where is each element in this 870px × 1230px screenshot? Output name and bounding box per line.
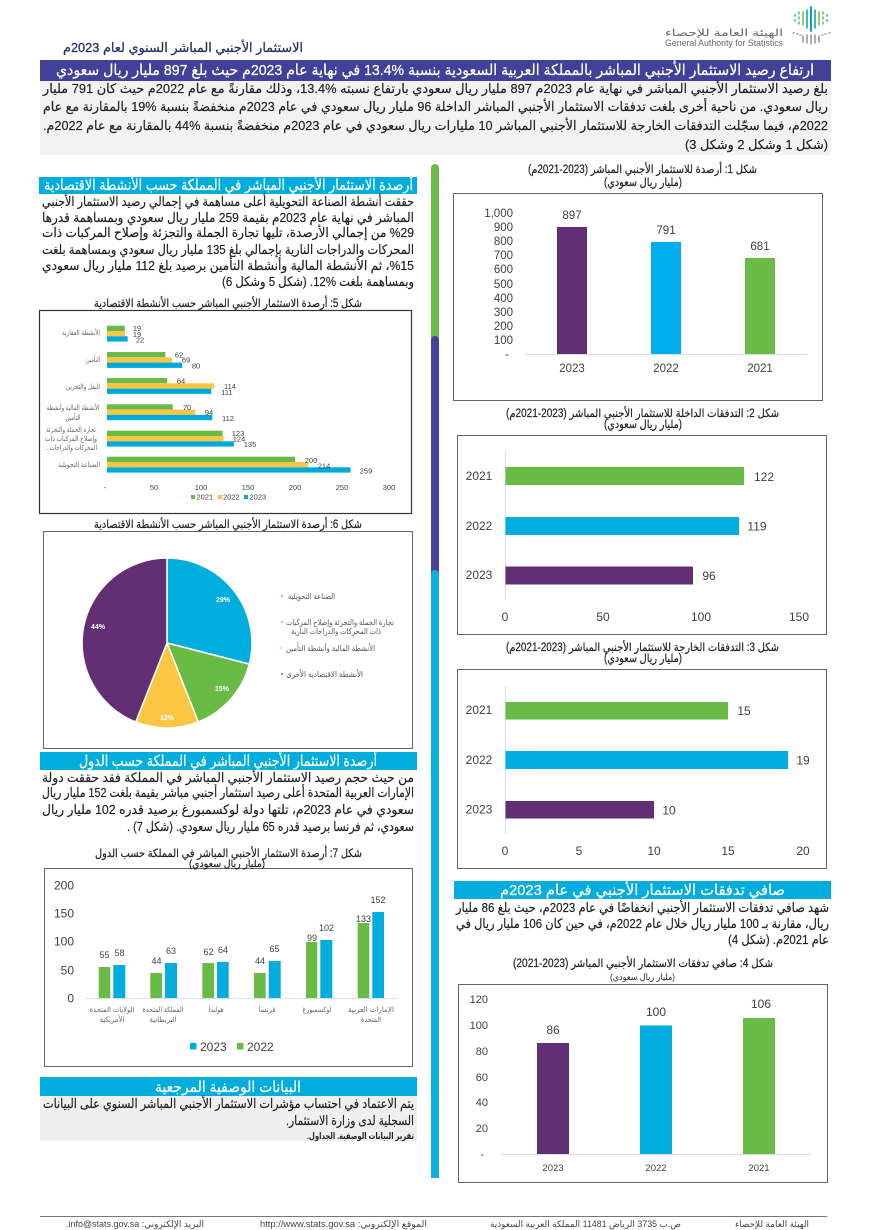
text block: economic activity: %15، ثم الأنشطة المالية وأنشطة التأمين برصيد بلغ 112 مليار ريال سعودي — [42, 256, 414, 274]
chart title: figure 1: (مليار ريال سعودي) — [604, 177, 682, 190]
axis, year and value labels: 2023 — [466, 802, 493, 816]
chart title: figure 1: شكل 1: أرصدة للاستثمار الأجنبي المباشر (2023-2021م) — [528, 161, 757, 177]
country labels: هولندا — [208, 1005, 224, 1014]
category labels: تجارة الجملة والتجزئة — [46, 427, 96, 434]
y axis labels: 200 — [494, 321, 513, 333]
value and year labels — [542, 997, 771, 1174]
value and year labels: 2023 — [559, 363, 585, 375]
chart title: figure 3 — [506, 640, 779, 666]
heading: stocks by economic activity: أرصدة الاستثمار الأجنبي المباشر في المملكة حسب الأنشطة الاقتصادية — [44, 175, 413, 195]
y axis labels: 400 — [494, 293, 513, 305]
heading: net FDI flows — [454, 880, 831, 900]
intro text block — [40, 80, 831, 155]
text block: reference metadata: السجلية لدى وزارة الاستثمار. — [286, 1113, 414, 1129]
pie chart: figure 6 shares by activity — [43, 531, 413, 749]
category labels — [45, 328, 100, 469]
text block: reference metadata: يتم الاعتماد في احتساب مؤشرات الاستثمار الأجنبي المباشر السنوي على البيانات — [43, 1095, 414, 1112]
text block: stocks by country: سعودي، ثم فرنسا برصيد قدره 65 مليار ريال سعودي. (شكل 7) . — [127, 819, 414, 835]
footer: البريد الإلكتروني: info@stats.gov.sa. — [66, 1219, 204, 1230]
value and year labels: 86 — [546, 1023, 560, 1037]
y axis labels: 300 — [494, 307, 513, 319]
legend: 2023 — [200, 1040, 227, 1054]
report subtitle: الاستثمار الأجنبي المباشر السنوي لعام 2023م — [63, 39, 303, 56]
slice percentages: 12% — [160, 715, 175, 722]
value labels: 55 — [99, 950, 110, 960]
y axis labels — [484, 208, 513, 361]
value labels: 69 — [182, 356, 190, 364]
value and year labels: 897 — [562, 210, 582, 222]
text block: economic activity: %29 من إجمالي الأرصدة، تليها تجارة الجملة والتجزئة وإصلاح المركبات ذات — [42, 224, 414, 241]
value labels: 65 — [269, 944, 280, 954]
text block: stocks by country: الإمارات العربية المتحدة أعلى رصيد استثمار أجنبي مباشر بقيمة بلغت 152 مليار ريال — [42, 784, 414, 801]
text block: economic activity: المحركات والدراجات النارية بإجمالي بلغ 135 مليار ريال سعودي وبمساهمة بلغت — [42, 242, 414, 258]
y axis labels: 150 — [54, 906, 74, 920]
country labels: البريطانية — [150, 1015, 176, 1024]
bars — [506, 702, 788, 818]
heading: stocks by country: أرصدة الاستثمار الأجنبي المباشر في المملكة حسب الدول — [79, 751, 377, 771]
chart title: figure 6: شكل 6: أرصدة الاستثمار الأجنبي المباشر حسب الأنشطة الاقتصادية — [94, 516, 362, 532]
category labels: المحركات والدراجات... — [45, 444, 97, 452]
y axis labels: 200 — [54, 878, 74, 892]
axis, year and value labels: 0 — [502, 610, 509, 624]
bar chart: figure 1 FDI stock — [453, 193, 823, 401]
legend: 2021 — [196, 492, 213, 502]
value labels: 19 — [133, 330, 141, 339]
value labels: 64 — [218, 945, 228, 955]
slice percentages: 29% — [216, 597, 231, 604]
text block: net FDI flows — [455, 899, 829, 948]
axis, year and value labels: 50 — [596, 610, 610, 624]
chart title: figure 2: شكل 2: التدفقات الداخلة للاستثمار الأجنبي المباشر (2023-2021م) — [506, 406, 779, 421]
axis, year and value labels: 96 — [702, 569, 716, 583]
text block: stocks by country: سعودي في عام 2023م، تلتها دولة لوكسمبورغ برصيد قدره 102 مليار ريال — [42, 802, 414, 818]
logo text: General Authority for Statistics — [665, 38, 783, 48]
chart title: figure 4: شكل 4: صافي تدفقات الاستثمار الأجنبي المباشر (2023-2021) — [513, 956, 773, 971]
bars 2023 — [113, 912, 384, 998]
country labels: الولايات المتحدة — [90, 1005, 134, 1014]
slice percentages — [91, 597, 231, 722]
country labels: المتحدة — [361, 1015, 381, 1024]
category labels: التأمين — [86, 354, 100, 364]
chart title: figure 7: شكل 7: أرصدة الاستثمار الأجنبي المباشر في المملكة حسب الدول — [95, 845, 362, 861]
legend: 2023 — [250, 492, 266, 502]
chart title: figure 4 — [513, 956, 773, 982]
axis, year and value labels: 5 — [576, 844, 583, 858]
y axis labels: 120 — [470, 994, 488, 1006]
value axis: 250 — [336, 483, 348, 492]
country labels: لوكسمبورغ — [302, 1005, 332, 1014]
value labels: 135 — [244, 440, 256, 449]
y axis labels: 50 — [61, 964, 74, 978]
y axis labels: - — [480, 1149, 484, 1161]
bars — [557, 227, 775, 354]
axis, year and value labels: 10 — [647, 844, 661, 858]
vertical divider bar: green — [431, 164, 439, 346]
intro text block: (شكل 1 وشكل 2 وشكل 3) — [685, 137, 828, 153]
axis, year and value labels: 15 — [737, 704, 751, 718]
value and year labels: 2021 — [748, 1163, 770, 1174]
slice percentages: 44% — [91, 624, 106, 631]
text block: economic activity — [42, 192, 414, 290]
y axis labels: 900 — [494, 222, 513, 234]
chart title: figure 7 — [95, 845, 362, 870]
value labels: 44 — [255, 956, 265, 966]
y axis labels: - — [505, 349, 509, 361]
y axis labels — [54, 878, 74, 1006]
value labels: 70 — [183, 403, 191, 412]
value labels: 58 — [114, 948, 125, 958]
bar chart: figure 4 net flows — [458, 984, 828, 1183]
y axis labels: 500 — [494, 279, 513, 291]
axis, year and value labels: 100 — [691, 610, 711, 624]
axis, year and value labels: 2022 — [466, 753, 493, 767]
axis, year and value labels — [466, 703, 810, 858]
country labels: الإمارات العربية — [348, 1005, 394, 1014]
value labels: 114 — [224, 382, 236, 391]
category labels: الأنشطة العقارية — [62, 328, 100, 337]
pie legend: الصناعة التحويلية — [288, 592, 335, 601]
bar chart: figure 7 stocks by country — [44, 868, 413, 1067]
value labels: 44 — [151, 956, 162, 966]
text block: stocks by country — [42, 769, 414, 835]
value axis — [104, 483, 395, 492]
intro text block: 2022م، فيما سجّلت التدفقات الخارجة للاستثمار الأجنبي المباشر 10 مليارات ريال سعودي في عام 2023م منخفضةً بنسبة %44 بالمقارنة مع عام 2022م. — [43, 117, 828, 134]
text block: net FDI flows: عام 2021م. (شكل 4) — [728, 932, 829, 947]
legend — [190, 1040, 274, 1054]
value labels: 62 — [203, 947, 214, 957]
value and year labels: 2023 — [542, 1163, 564, 1174]
y axis labels: 80 — [476, 1046, 488, 1058]
country labels — [90, 1005, 394, 1024]
logo text: الهيئة العامة للإحصاء — [665, 28, 783, 39]
footer: الموقع الإلكتروني: http://www.stats.gov.sa — [260, 1219, 427, 1230]
value labels: 112 — [222, 414, 234, 423]
axis, year and value labels: 150 — [789, 610, 809, 624]
value labels: 111 — [221, 388, 233, 397]
value labels: 63 — [166, 946, 176, 956]
heading: reference metadata: البيانات الوصفية المرجعية — [155, 1079, 301, 1096]
value labels: 22 — [136, 336, 144, 344]
value labels: 259 — [360, 466, 372, 476]
vertical divider bar: blue — [431, 570, 439, 1178]
axis, year and value labels: 19 — [796, 754, 810, 768]
footer: الهيئة العامة للإحصاء — [735, 1219, 809, 1230]
chart title: figure 5: شكل 5: أرصدة الاستثمار الأجنبي المباشر حسب الأنشطة الاقتصادية — [94, 295, 362, 311]
bars 2021 — [107, 326, 295, 462]
axis, year and value labels: 122 — [754, 470, 774, 484]
chart title: figure 2 — [506, 406, 779, 432]
legend — [191, 492, 266, 502]
pie legend: تجارة الجملة والتجزئة وإصلاح المركبات — [286, 618, 394, 628]
bar chart: figure 5 stocks by activity — [38, 310, 412, 514]
main headline bar: ارتفاع رصيد الاستثمار الأجنبي المباشر بالمملكة العربية السعودية بنسبة %13.4 في نهاية عام 2023م حيث بلغ 897 مليار ريال سعودي — [56, 60, 814, 80]
y axis labels: 100 — [54, 934, 74, 948]
value labels: 80 — [192, 362, 200, 370]
y axis labels: 100 — [470, 1020, 488, 1032]
value labels: 124 — [233, 434, 245, 444]
y axis labels: 20 — [476, 1123, 488, 1135]
country labels: فرنسا — [258, 1005, 276, 1014]
value axis: 200 — [289, 483, 301, 492]
pie legend: الأنشطة الاقتصادية الأخرى — [286, 669, 363, 679]
value labels: 133 — [356, 914, 371, 924]
logo: General Authority for Statistics — [665, 6, 830, 48]
pie slices — [82, 558, 252, 728]
bars 2022 — [107, 331, 308, 467]
category labels: الصناعة التحويلية — [58, 462, 100, 469]
intro text block: بلغ رصيد الاستثمار الأجنبي المباشر في نهاية عام 2023م 897 مليار ريال سعودي بارتفاع نسبته %13.4، وذلك مقارنةً مع عام 2022م حيث كان 791 مليار — [42, 80, 828, 97]
bars 2023 — [107, 336, 350, 473]
footer — [40, 1216, 827, 1230]
heading: reference metadata — [40, 1077, 417, 1096]
slice percentages: 15% — [215, 686, 230, 693]
chart title: figure 7: (مليار ريال سعودي) — [189, 859, 265, 870]
value labels: 99 — [307, 933, 317, 943]
pie legend: ذات المحركات والدراجات النارية — [291, 627, 381, 636]
bars 2022 — [99, 923, 369, 998]
chart title: figure 3: شكل 3: التدفقات الخارجة للاستثمار الأجنبي المباشر (2023-2021م) — [506, 640, 779, 655]
value and year labels: 106 — [751, 997, 771, 1011]
axis, year and value labels: 2023 — [466, 568, 493, 582]
legend: 2022 — [247, 1040, 274, 1054]
intro text block: ريال سعودي. من ناحية أخرى بلغت تدفقات الاستثمار الأجنبي المباشر الداخلة 96 مليار ريال سعودي في عام 2023م منخفضةً بنسبة %19 بالمقارنة مع عام — [43, 98, 828, 115]
value labels: 152 — [370, 895, 386, 905]
category labels: التأمين — [66, 412, 81, 422]
chart title: figure 1 — [528, 161, 757, 190]
chart title: figure 2: (مليار ريال سعودي) — [604, 419, 682, 432]
vertical divider bar: purple — [431, 336, 439, 580]
value and year labels: 791 — [656, 225, 676, 237]
axis, year and value labels — [466, 469, 809, 624]
value axis: 50 — [150, 483, 158, 492]
text block: reference metadata — [40, 1095, 417, 1142]
axis, year and value labels: 119 — [747, 520, 767, 534]
chart title: figure 4: (مليار ريال سعودي) — [610, 972, 675, 982]
value labels: 123 — [232, 429, 244, 438]
y axis labels — [470, 994, 488, 1161]
text block: reference metadata: تقرير البيانات الوصفية. الجداول. — [307, 1131, 414, 1142]
axis, year and value labels: 2021 — [466, 703, 493, 717]
category labels: وإصلاح المركبات ذات — [45, 435, 97, 443]
text block: net FDI flows: ريال، مقارنة بـ 100 مليار ريال خلال عام 2022م، في حين كان 106 مليار ريال في — [456, 916, 829, 932]
pie legend: الأنشطة المالية وأنشطة التأمين — [286, 642, 375, 653]
y axis labels: 40 — [476, 1097, 488, 1109]
axis, year and value labels: 20 — [796, 844, 810, 858]
y axis labels: 800 — [494, 236, 513, 248]
value labels: 62 — [175, 350, 183, 360]
text block: net FDI flows: شهد صافي تدفقات الاستثمار الأجنبي انخفاضًا في عام 2023م، حيث بلغ 86 مليار — [455, 899, 829, 916]
value labels: 64 — [177, 376, 185, 386]
value labels: 214 — [318, 462, 330, 470]
y axis labels: 0 — [67, 992, 74, 1006]
text block: economic activity: حققت أنشطة الصناعة التحويلية أعلى مساهمة في إجمالي رصيد الاستثمار الأجنبي — [42, 193, 414, 210]
value labels: 19 — [133, 324, 141, 333]
country labels: المملكة المتحدة — [142, 1005, 184, 1014]
y axis labels: 1,000 — [484, 208, 513, 220]
value labels — [133, 324, 372, 476]
axis, year and value labels: 15 — [721, 844, 735, 858]
axis, year and value labels: 10 — [662, 804, 676, 818]
value and year labels: 2022 — [653, 363, 679, 375]
y axis labels: 700 — [494, 250, 513, 262]
value and year labels: 2021 — [747, 363, 773, 375]
axis, year and value labels: 2022 — [466, 519, 493, 533]
y axis labels: 100 — [494, 335, 513, 347]
value axis: - — [104, 483, 107, 492]
y axis labels: 60 — [476, 1072, 488, 1084]
icon: statistics logo mark — [793, 7, 830, 44]
logo text — [665, 28, 783, 48]
heading: net FDI flows: صافي تدفقات الاستثمار الأجنبي في عام 2023م — [500, 880, 785, 900]
value axis: 100 — [195, 483, 207, 492]
bar chart: figure 3 outflows — [457, 669, 827, 869]
legend: 2022 — [223, 492, 240, 502]
value and year labels — [559, 210, 773, 375]
bars — [506, 467, 744, 584]
value labels: 102 — [319, 923, 334, 933]
value labels — [99, 895, 386, 966]
bars — [537, 1018, 775, 1154]
footer: ص.ب 3735 الرياض 11481 المملكة العربية السعودية — [490, 1219, 681, 1229]
y axis labels: 600 — [494, 264, 513, 276]
axis, year and value labels: 2021 — [466, 469, 493, 483]
value axis: 150 — [242, 483, 254, 492]
value axis: 300 — [383, 483, 395, 492]
category labels: النقل والتخزين — [66, 384, 100, 391]
value and year labels: 100 — [646, 1005, 666, 1019]
text block: economic activity: المباشر في نهاية عام 2023م بقيمة 259 مليار ريال سعودي وبمساهمة قدرها — [42, 210, 414, 226]
value and year labels: 2022 — [645, 1163, 667, 1174]
axis, year and value labels: 0 — [502, 844, 509, 858]
text block: economic activity: وبمساهمة بلغت %12. (شكل 5 وشكل 6) — [222, 274, 414, 290]
text block: stocks by country: من حيث حجم رصيد الاستثمار الأجنبي المباشر في المملكة فقد حققت دولة — [42, 769, 414, 786]
country labels: الأمريكية — [100, 1014, 124, 1024]
chart title: figure 3: (مليار ريال سعودي) — [604, 653, 682, 666]
value labels: 200 — [305, 456, 317, 465]
bar chart: figure 2 inflows — [457, 435, 827, 635]
value labels: 94 — [205, 408, 213, 417]
value and year labels: 681 — [750, 241, 770, 253]
pie legend — [280, 592, 394, 679]
category labels: الأنشطة المالية وأنشطة — [46, 403, 100, 412]
